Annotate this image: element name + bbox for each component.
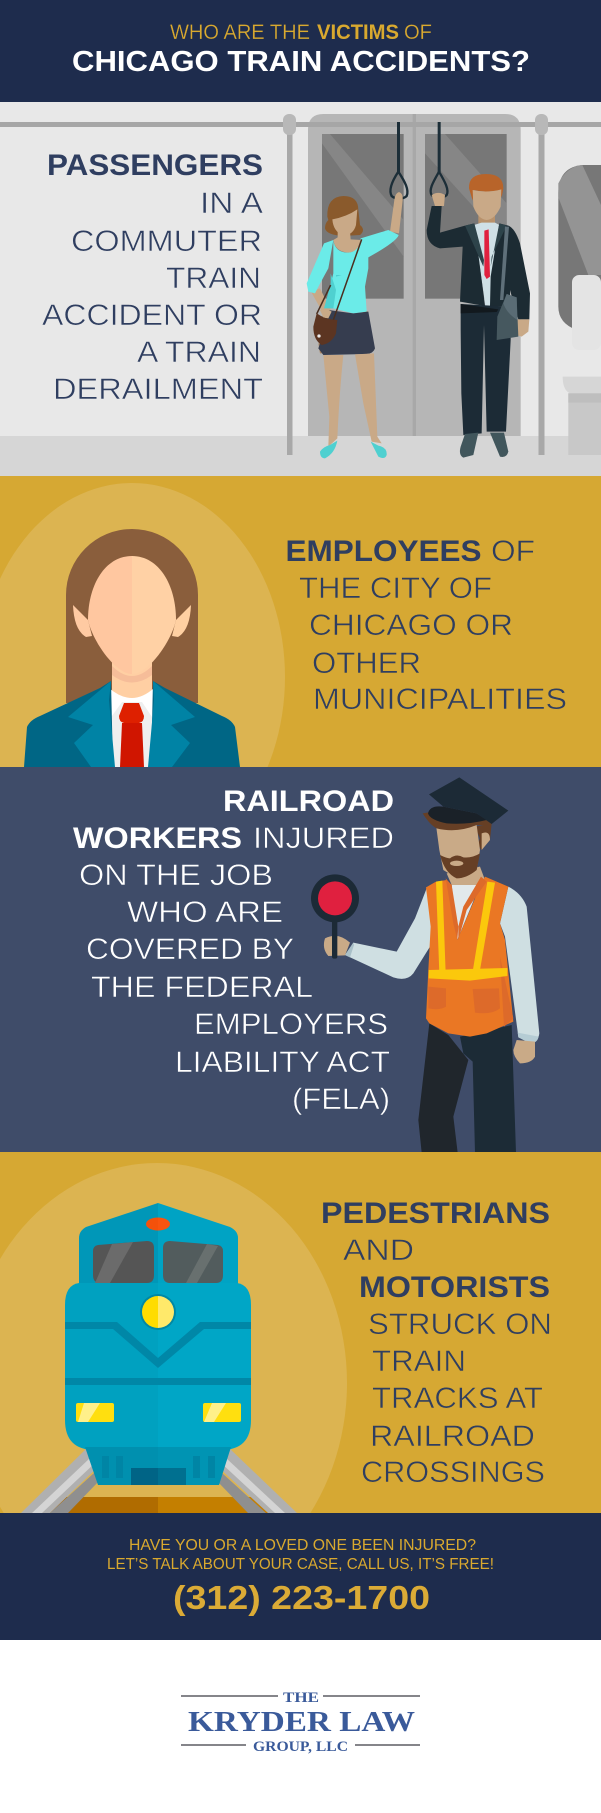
logo: The Kryder Law Group, LLC <box>181 1690 420 1755</box>
text: employees: MUNICIPALITIES <box>313 683 567 716</box>
text: passengers <box>42 149 263 406</box>
train interior scene <box>0 114 601 455</box>
text: railroad workers: WORKERS <box>73 822 242 855</box>
text: passengers: DERAILMENT <box>53 373 263 406</box>
text: passengers: A TRAIN <box>137 336 261 369</box>
text: railroad workers: ON THE JOB <box>79 859 273 892</box>
text: passengers: ACCIDENT OR <box>42 299 262 332</box>
icon: man passenger <box>427 174 530 458</box>
text: passengers: IN A <box>200 187 263 220</box>
text: call to action: LET’S TALK ABOUT YOUR CASE, CALL US, IT’S FREE! <box>107 1556 494 1573</box>
phone number: (312) 223-1700 <box>173 1579 430 1616</box>
text: pedestrians and motorists: RAILROAD <box>370 1420 535 1453</box>
icon: woman passenger <box>307 192 403 458</box>
icon: woman employee portrait <box>0 483 285 767</box>
icon: railroad worker with signal paddle <box>311 777 539 1153</box>
text: railroad workers: LIABILITY ACT <box>175 1046 390 1079</box>
text: pedestrians and motorists: CROSSINGS <box>361 1456 545 1489</box>
text: railroad workers: (FELA) <box>292 1083 390 1116</box>
text: employees: OTHER <box>312 647 421 680</box>
panel: header <box>0 0 601 102</box>
text: call to action <box>107 1537 494 1573</box>
text: employees: THE CITY OF <box>299 572 492 605</box>
text: passengers: PASSENGERS <box>47 149 263 182</box>
text: railroad workers: WHO ARE <box>127 896 283 929</box>
text: passengers: TRAIN <box>166 262 261 295</box>
panel: call to action footer <box>0 1513 601 1640</box>
logo: The Kryder Law Group, LLC: GROUP, LLC <box>253 1739 348 1755</box>
text: passengers: COMMUTER <box>71 225 262 258</box>
text: pedestrians and motorists: AND <box>343 1234 414 1267</box>
panel: passengers <box>0 102 601 476</box>
text: pedestrians and motorists: PEDESTRIANS <box>321 1197 550 1230</box>
text: railroad workers: COVERED BY <box>86 933 294 966</box>
title: VICTIMS <box>317 21 399 44</box>
logo: The Kryder Law Group, LLC: THE <box>283 1690 319 1706</box>
text: employees: EMPLOYEES <box>286 535 482 568</box>
icon: locomotive on tracks <box>0 1163 347 1513</box>
panel: employees <box>0 476 601 767</box>
text: pedestrians and motorists: TRACKS AT <box>372 1382 543 1415</box>
text: railroad workers: THE FEDERAL <box>91 971 313 1004</box>
panel: pedestrians and motorists <box>0 1152 601 1513</box>
text: railroad workers: INJURED <box>253 822 394 855</box>
icon: hanging straps <box>390 122 447 198</box>
logo: The Kryder Law Group, LLC: KRYDER LAW <box>188 1706 415 1738</box>
text: employees: OF <box>491 535 535 568</box>
title: WHO ARE THE <box>170 21 310 44</box>
text: railroad workers: RAILROAD <box>223 785 394 818</box>
title <box>72 21 530 78</box>
panel: railroad workers <box>0 767 601 1153</box>
title: CHICAGO TRAIN ACCIDENTS? <box>72 46 530 78</box>
text: pedestrians and motorists: TRAIN <box>372 1345 466 1378</box>
text: railroad workers: EMPLOYERS <box>194 1008 388 1041</box>
text: pedestrians and motorists <box>321 1197 552 1489</box>
text: call to action: HAVE YOU OR A LOVED ONE BEEN INJURED? <box>129 1537 476 1554</box>
text: pedestrians and motorists: MOTORISTS <box>359 1271 550 1304</box>
title: OF <box>404 21 432 44</box>
text: employees <box>286 535 567 716</box>
text: employees: CHICAGO OR <box>309 609 513 642</box>
text: railroad workers <box>73 785 394 1116</box>
text: pedestrians and motorists: STRUCK ON <box>368 1308 552 1341</box>
